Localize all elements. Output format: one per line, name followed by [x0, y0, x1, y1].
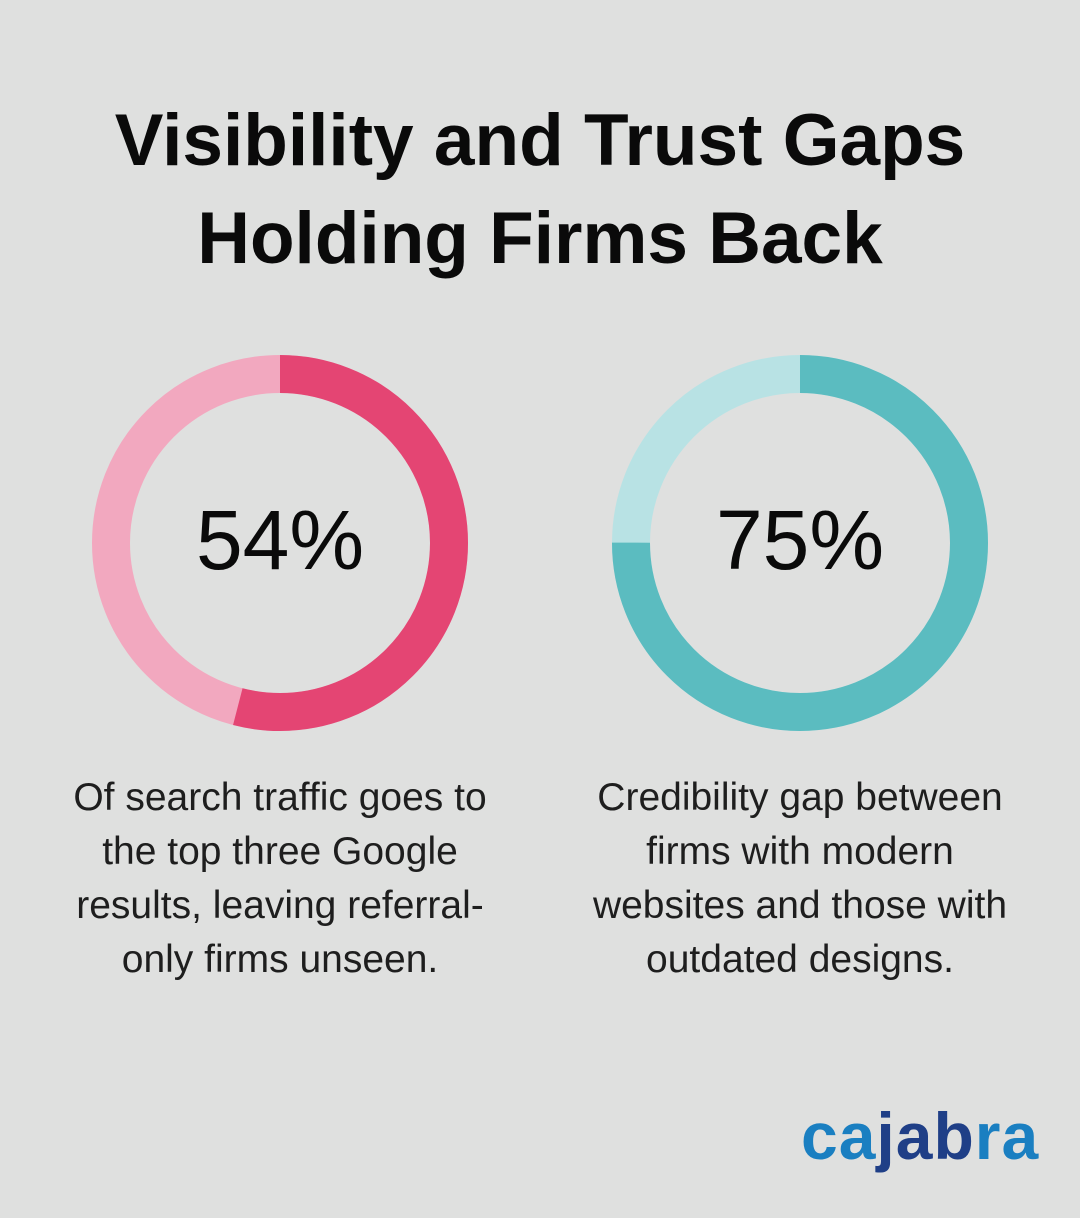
text block: left description: the top three Google [102, 830, 458, 873]
donut chart: 54% [92, 355, 468, 731]
donut chart: 75%: 75% [716, 493, 884, 587]
donut chart: 54%: 54% [196, 493, 364, 587]
title: Visibility and Trust Gaps [115, 100, 965, 181]
text block: right description: firms with modern [646, 830, 954, 873]
text block: right description: Credibility gap between [597, 776, 1003, 819]
text block: left description: results, leaving referral- [76, 884, 484, 927]
text block: right description: outdated designs. [646, 938, 954, 981]
text block: right description [593, 776, 1007, 981]
text block: right description: websites and those with [593, 884, 1007, 927]
text block: left description [73, 776, 487, 981]
title: Holding Firms Back [197, 198, 883, 279]
logo: cajabra [801, 1099, 1039, 1173]
title [115, 100, 965, 279]
text block: left description: only firms unseen. [122, 938, 438, 981]
text block: left description: Of search traffic goes to [73, 776, 487, 819]
donut chart: 75% [612, 355, 988, 731]
